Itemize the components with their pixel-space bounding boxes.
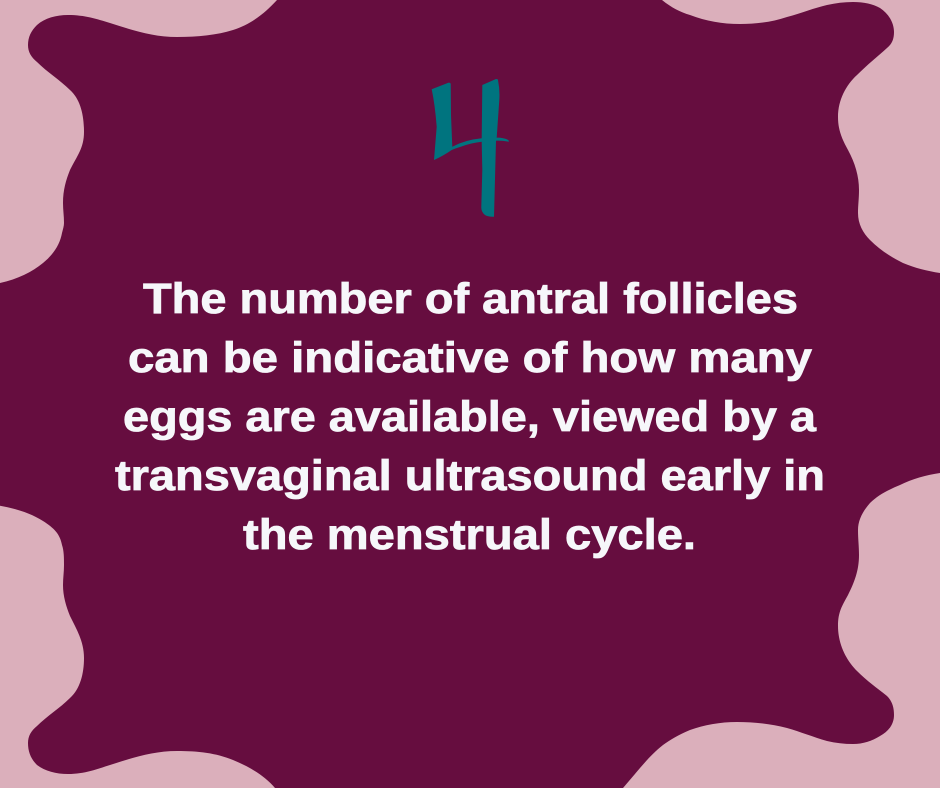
body text	[115, 275, 825, 559]
text line 5: the menstrual cycle.	[243, 511, 696, 559]
text line 3: eggs are available, viewed by a	[123, 393, 817, 441]
text line 1: The number of antral follicles	[143, 275, 798, 323]
text line 2: can be indicative of how many	[128, 334, 812, 382]
numeral 4	[432, 79, 509, 217]
text line 4: transvaginal ultrasound early in	[115, 452, 825, 500]
